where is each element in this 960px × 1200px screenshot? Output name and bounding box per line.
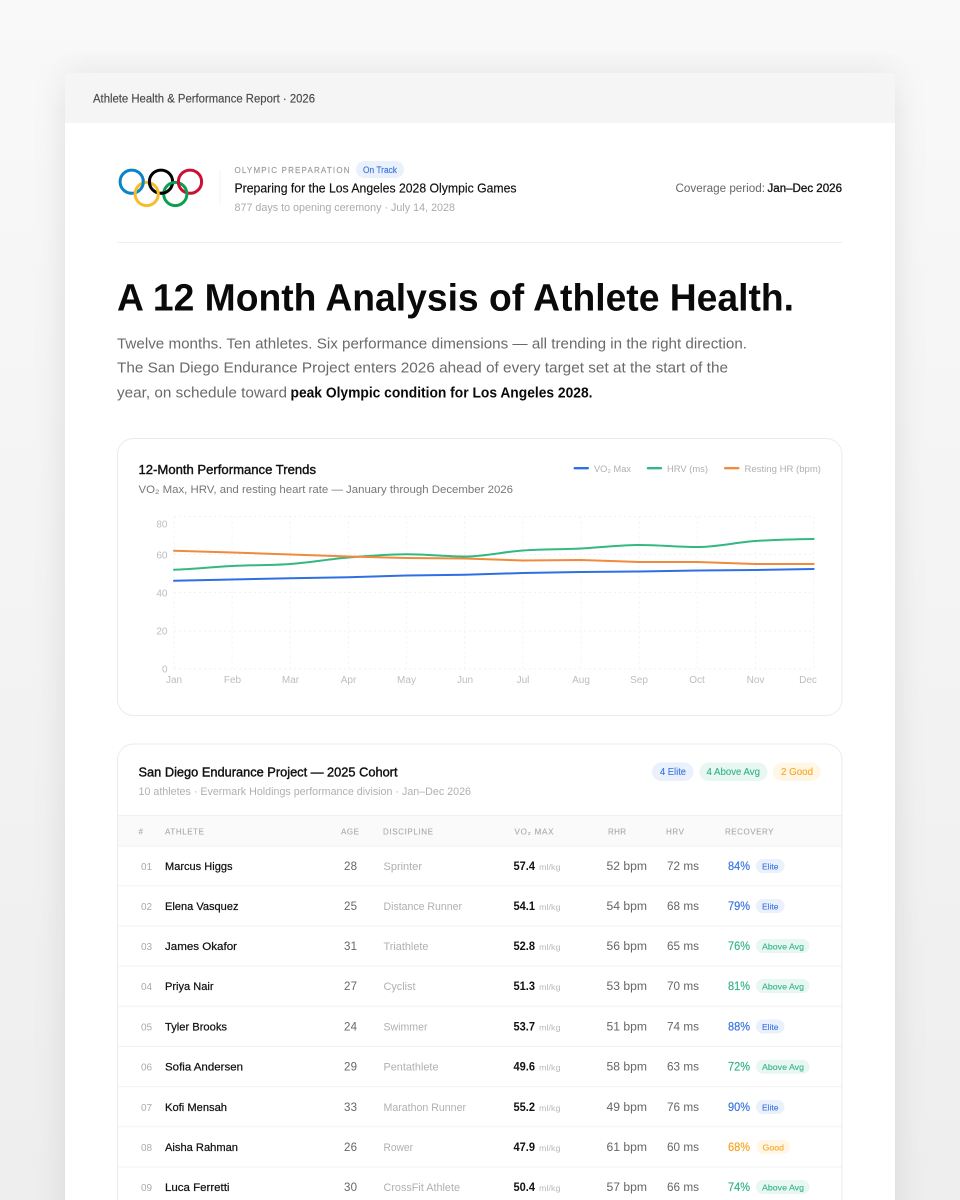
x axis labels: Dec — [799, 675, 817, 686]
row: Kofi Mensah: 90% — [728, 1102, 750, 1114]
row: Aisha Rahman: 47.9 — [514, 1142, 535, 1154]
row: Elena Vasquez: 68 ms — [667, 901, 699, 913]
status pill: on track — [356, 161, 404, 178]
row: Aisha Rahman: Aisha Rahman — [165, 1142, 238, 1154]
row: Elena Vasquez: 02 — [141, 902, 152, 913]
badge: Elite — [756, 1100, 784, 1114]
badge: Above Avg: Above Avg — [762, 1182, 804, 1192]
olympic preparation block: OLYMPIC PREPARATION — [234, 166, 350, 175]
badge: Above Avg — [756, 979, 810, 993]
row: Tyler Brooks: 05 — [141, 1022, 152, 1034]
row: Tyler Brooks: 51 bpm — [606, 1022, 647, 1034]
x axis labels: May — [397, 675, 416, 686]
row: James Okafor: 65 ms — [667, 941, 699, 953]
coverage period: Jan–Dec 2026 — [768, 183, 842, 195]
row: Elena Vasquez: 54.1 — [514, 901, 536, 913]
olympic preparation block: Preparing for the Los Angeles 2028 Olympic Games — [234, 182, 516, 196]
row: Elena Vasquez: ml/kg — [539, 902, 561, 912]
x axis labels: Feb — [224, 675, 242, 686]
row: Luca Ferretti: 09 — [141, 1183, 152, 1194]
row: Aisha Rahman: 08 — [141, 1143, 152, 1154]
line chart — [156, 516, 817, 686]
row: Aisha Rahman: Rower — [384, 1142, 413, 1154]
badge: Elite: Elite — [762, 902, 779, 912]
badge: Above Avg — [756, 1060, 810, 1074]
olympic preparation block — [234, 161, 516, 214]
row: Priya Nair — [141, 979, 810, 993]
y axis labels: 20 — [156, 626, 168, 638]
table header row: RECOVERY — [725, 828, 774, 836]
badge: Good — [756, 1140, 790, 1154]
x axis labels: Oct — [689, 675, 705, 686]
x axis labels: Apr — [341, 675, 357, 686]
row: Priya Nair: Cyclist — [384, 981, 416, 993]
line: VO2 max — [174, 569, 814, 581]
row: Marcus Higgs: 57.4 — [514, 861, 536, 873]
row: Sofia Andersen: 49.6 — [514, 1062, 535, 1074]
chart legend: VO₂ Max — [594, 464, 631, 475]
badge: Above Avg — [756, 939, 810, 953]
row: Priya Nair: 04 — [141, 982, 152, 993]
row: James Okafor: 03 — [141, 942, 152, 953]
table header row: VO₂ MAX — [514, 828, 554, 836]
row: Priya Nair: 81% — [728, 981, 750, 993]
row: Sofia Andersen: 29 — [344, 1062, 357, 1074]
row: Priya Nair: 27 — [344, 981, 357, 993]
row: Kofi Mensah: ml/kg — [539, 1103, 561, 1113]
table header row: RHR — [608, 828, 626, 836]
table header row: HRV — [666, 828, 685, 836]
row: Aisha Rahman: ml/kg — [539, 1143, 561, 1153]
row: Elena Vasquez: Elena Vasquez — [165, 901, 239, 913]
row: Marcus Higgs — [141, 859, 784, 873]
table header row: ATHLETE — [165, 828, 204, 836]
row: Kofi Mensah: Marathon Runner — [384, 1102, 466, 1114]
row: Sofia Andersen: 63 ms — [667, 1062, 699, 1074]
intro paragraph — [117, 336, 747, 402]
row: Aisha Rahman: 61 bpm — [606, 1142, 647, 1154]
row: Luca Ferretti: 66 ms — [667, 1182, 699, 1194]
row: Sofia Andersen: 06 — [141, 1063, 152, 1074]
y axis labels: 60 — [156, 550, 168, 562]
row: Marcus Higgs: 84% — [728, 861, 750, 873]
tier summary pills: 2 Good — [781, 767, 813, 778]
badge: Elite: Elite — [762, 1022, 779, 1032]
chart legend: HRV (ms) — [667, 464, 708, 475]
row: Marcus Higgs: 28 — [344, 861, 357, 873]
row: Tyler Brooks: 74 ms — [667, 1022, 699, 1034]
coverage period — [676, 183, 842, 195]
y axis labels: 0 — [162, 664, 168, 676]
row: Priya Nair: 53 bpm — [606, 981, 647, 993]
badge: Good: Good — [762, 1142, 784, 1152]
row: James Okafor: 76% — [728, 941, 750, 953]
chart legend — [574, 464, 821, 475]
badge: Above Avg: Above Avg — [762, 942, 804, 952]
row: Marcus Higgs: 52 bpm — [606, 861, 647, 873]
row: James Okafor: James Okafor — [165, 941, 237, 953]
panel: cohort table — [118, 744, 842, 1200]
x axis labels: Jul — [517, 675, 529, 686]
row: Sofia Andersen: 58 bpm — [606, 1062, 647, 1074]
row: Marcus Higgs: Marcus Higgs — [165, 861, 233, 873]
row: James Okafor: 52.8 — [514, 941, 536, 953]
row: Marcus Higgs: 01 — [141, 862, 152, 873]
row: Aisha Rahman: 26 — [344, 1142, 357, 1154]
x axis labels — [166, 675, 817, 686]
badge: Above Avg — [756, 1180, 810, 1194]
row: Tyler Brooks — [141, 1020, 784, 1034]
intro paragraph: peak Olympic condition for Los Angeles 2028. — [290, 386, 592, 402]
row: Sofia Andersen — [141, 1060, 810, 1074]
y axis labels — [156, 520, 168, 676]
y axis labels: 40 — [156, 588, 168, 600]
line: HRV — [174, 539, 814, 570]
x axis labels: Aug — [572, 675, 590, 686]
row: Luca Ferretti: Luca Ferretti — [165, 1182, 230, 1194]
row: James Okafor: Triathlete — [384, 941, 428, 953]
row: Aisha Rahman — [141, 1140, 790, 1154]
row: Elena Vasquez — [141, 899, 784, 913]
row: Kofi Mensah: 07 — [141, 1103, 152, 1114]
status pill: on track: On Track — [363, 165, 398, 175]
table heading: San Diego Endurance Project — 2025 Cohort — [138, 764, 398, 780]
row: Aisha Rahman: 68% — [728, 1142, 750, 1154]
row: James Okafor — [141, 939, 810, 953]
row: Elena Vasquez: 54 bpm — [606, 901, 647, 913]
row: Luca Ferretti: ml/kg — [539, 1183, 561, 1193]
row: Kofi Mensah: 49 bpm — [606, 1102, 647, 1114]
x axis labels: Jun — [457, 675, 473, 686]
row: Kofi Mensah — [141, 1100, 784, 1114]
badge: Elite — [756, 859, 784, 873]
tier summary pills — [652, 762, 820, 781]
row: Elena Vasquez: 25 — [344, 901, 357, 913]
table subtitle: 10 athletes · Evermark Holdings performance division · Jan–Dec 2026 — [138, 786, 471, 798]
row: Priya Nair: Priya Nair — [165, 981, 214, 993]
row: Elena Vasquez: 79% — [728, 901, 750, 913]
row: Marcus Higgs: Sprinter — [384, 861, 422, 873]
row: Luca Ferretti: 74% — [728, 1182, 750, 1194]
report top bar: Athlete Health & Performance Report · 2026 — [93, 94, 315, 106]
intro paragraph: The San Diego Endurance Project enters 2026 ahead of every target set at the start of the — [117, 360, 728, 376]
badge: Above Avg: Above Avg — [762, 1062, 804, 1072]
row: Priya Nair: 70 ms — [667, 981, 699, 993]
row: Marcus Higgs: 72 ms — [667, 861, 699, 873]
row: Elena Vasquez: Distance Runner — [384, 901, 462, 913]
badge: Elite: Elite — [762, 1102, 779, 1112]
row: Kofi Mensah: Kofi Mensah — [165, 1102, 227, 1114]
report top bar — [65, 73, 895, 123]
row: Sofia Andersen: Sofia Andersen — [165, 1062, 243, 1074]
table header row: # — [138, 828, 144, 836]
row: Sofia Andersen: ml/kg — [539, 1063, 561, 1073]
chart heading: 12-Month Performance Trends — [138, 462, 316, 477]
row: James Okafor: ml/kg — [539, 942, 561, 952]
line: resting HR — [174, 551, 814, 564]
row: Sofia Andersen: 72% — [728, 1062, 750, 1074]
coverage period: Coverage period: — [676, 183, 765, 195]
panel: performance trends chart — [118, 438, 842, 716]
intro paragraph: year, on schedule toward — [117, 384, 287, 402]
tier summary pills: 4 Elite — [660, 767, 686, 778]
badge: Elite — [756, 1020, 784, 1034]
title: A 12 Month Analysis of Athlete Health. — [117, 278, 794, 320]
x axis labels: Mar — [282, 675, 300, 686]
row: Tyler Brooks: 88% — [728, 1022, 750, 1034]
row: Tyler Brooks: Tyler Brooks — [165, 1022, 227, 1034]
chart subtitle: VO₂ Max, HRV, and resting heart rate — January through December 2026 — [138, 484, 513, 496]
row: Tyler Brooks: ml/kg — [539, 1022, 561, 1032]
table header row: DISCIPLINE — [383, 828, 433, 836]
row: Luca Ferretti: 50.4 — [514, 1182, 536, 1194]
row: Luca Ferretti — [141, 1180, 810, 1194]
badge: Elite — [756, 899, 784, 913]
row: Kofi Mensah: 33 — [344, 1102, 357, 1114]
row: Aisha Rahman: 60 ms — [667, 1142, 699, 1154]
row: Luca Ferretti: 57 bpm — [606, 1182, 647, 1194]
x axis labels: Jan — [166, 675, 182, 686]
row: Sofia Andersen: Pentathlete — [384, 1062, 438, 1074]
row: Priya Nair: 51.3 — [514, 981, 535, 993]
row: Kofi Mensah: 55.2 — [514, 1102, 535, 1114]
icon: olympic rings — [120, 170, 202, 206]
x axis labels: Nov — [747, 675, 764, 686]
row: Tyler Brooks: Swimmer — [384, 1022, 428, 1034]
olympic preparation block: 877 days to opening ceremony · July 14, 2028 — [234, 202, 455, 214]
row: Kofi Mensah: 76 ms — [667, 1102, 699, 1114]
row: Luca Ferretti: 30 — [344, 1182, 357, 1194]
table header row: AGE — [341, 828, 359, 836]
row: Priya Nair: ml/kg — [539, 982, 561, 992]
y axis labels: 80 — [156, 520, 168, 530]
row: Tyler Brooks: 53.7 — [514, 1022, 535, 1034]
row: James Okafor: 56 bpm — [606, 941, 647, 953]
x axis labels: Sep — [630, 675, 648, 686]
row: Luca Ferretti: CrossFit Athlete — [384, 1182, 460, 1194]
badge: Above Avg: Above Avg — [762, 982, 804, 992]
table header row — [118, 816, 842, 846]
intro paragraph: Twelve months. Ten athletes. Six performance dimensions — all trending in the right direction. — [117, 336, 747, 352]
row: James Okafor: 31 — [344, 941, 357, 953]
chart legend: Resting HR (bpm) — [744, 464, 821, 475]
row: Marcus Higgs: ml/kg — [539, 862, 561, 872]
badge: Elite: Elite — [762, 862, 779, 872]
tier summary pills: 4 Above Avg — [706, 767, 760, 778]
row: Tyler Brooks: 24 — [344, 1022, 358, 1034]
